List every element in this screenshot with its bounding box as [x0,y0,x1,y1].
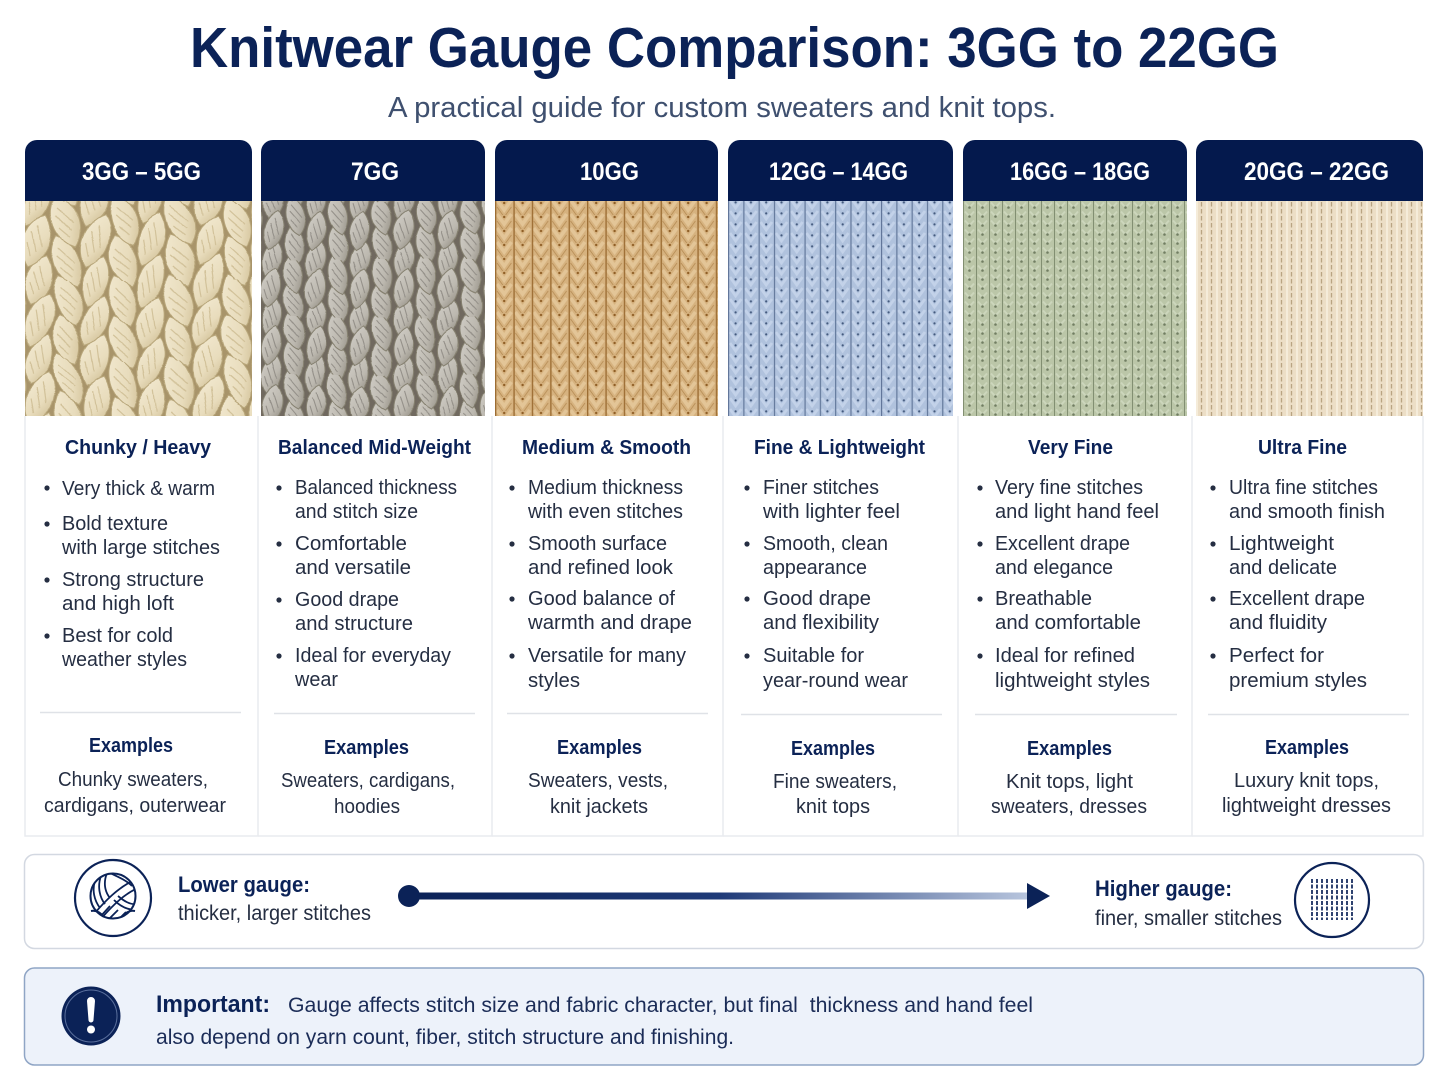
swatch: blue knit [728,201,953,416]
panel: 20GG-22GG [1192,140,1423,836]
bullet list [509,477,692,692]
examples: Chunky sweaters, [58,769,208,791]
bullet list [744,477,908,692]
header: 3GG-5GG [25,140,252,201]
panel: 3GG-5GG [0,140,285,836]
bullet list: Good drape [295,589,399,611]
bullet list: Bold texture [62,513,168,535]
header: 12GG-14GG [728,140,953,201]
examples: knit tops [796,796,870,818]
bullet list: Very thick & warm [62,478,215,500]
bullet list: and stitch size [295,501,418,523]
bullet list [1210,477,1385,692]
text: higher gauge: Higher gauge: [1095,876,1232,901]
panel: 10GG [492,140,723,836]
examples: Fine sweaters, [773,771,897,793]
examples: Examples [1027,738,1112,760]
bullet list: Strong structure [62,569,204,591]
text: lower gauge: thicker, larger stitches [178,902,371,925]
header: 16GG-18GG [963,140,1187,201]
bullet list: and structure [295,613,413,635]
header: 7GG: 7GG [351,158,399,186]
header: 16GG-18GG: 16GG – 18GG [1010,158,1150,186]
bullet list: Finer stitches [763,477,879,499]
swatch: chunky knit [25,201,252,416]
bullet list: with large stitches [61,537,220,559]
panel: 16GG-18GG [958,140,1192,836]
text: important note: also depend on yarn count, fiber, stitch structure and finishing. [156,1026,734,1049]
heading: Medium & Smooth: Medium & Smooth [522,436,691,459]
bullet list: Smooth surface [528,533,667,555]
examples: Sweaters, vests, [528,770,668,792]
bullet list: Versatile for many [528,645,686,667]
bullet list: Good balance of [528,588,675,610]
bullet list: Balanced thickness [295,477,457,499]
bullet list [276,477,457,691]
bullet list: Suitable for [763,645,864,667]
bullet list: and smooth finish [1229,501,1385,523]
bullet list: Ultra fine stitches [1229,477,1378,499]
swatch: beige knit [1196,201,1423,416]
bullet list: and high loft [62,593,174,615]
examples: Luxury knit tops, [1234,770,1379,792]
header: 7GG [261,140,485,201]
bullet list: Lightweight [1229,533,1334,555]
bullet list: and versatile [295,557,411,579]
bullet list: Excellent drape [1229,588,1365,610]
bullet list: Breathable [995,588,1092,610]
bullet list: and fluidity [1229,612,1327,634]
panel: 12GG-14GG [723,140,958,836]
header: 12GG-14GG: 12GG – 14GG [769,158,908,186]
swatch: green knit [963,201,1187,416]
heading: Ultra Fine: Ultra Fine [1258,436,1347,459]
examples: Examples [89,735,173,757]
icon: yarn ball [75,860,151,936]
text: important note [156,991,1033,1049]
examples: Examples [557,737,642,759]
panel: gauge scale [24,854,1424,948]
text: lower gauge [178,872,371,925]
examples: Examples [1265,737,1349,759]
bullet list: Perfect for [1229,645,1324,667]
bullet list: and flexibility [763,612,879,634]
examples: cardigans, outerwear [44,795,226,817]
swatch: tan knit [495,201,718,416]
examples [1222,737,1391,817]
bullet list: Excellent drape [995,533,1130,555]
panel: important note [24,968,1424,1065]
header: 3GG-5GG: 3GG – 5GG [82,158,201,186]
panel: 7GG [231,140,521,836]
bullet list: lightweight styles [995,670,1150,692]
examples [773,738,897,818]
header: 10GG: 10GG [580,158,639,186]
swatch: grey knit [261,201,485,416]
bullet list: Very fine stitches [995,477,1143,499]
examples: Examples [791,738,875,760]
bullet list: with lighter feel [762,501,900,523]
examples: hoodies [334,796,400,818]
subtitle: A practical guide for custom sweaters and knit tops. [388,92,1056,124]
bullet list [977,477,1159,692]
bullet list: Smooth, clean [763,533,888,555]
heading: Balanced Mid-Weight: Balanced Mid-Weight [278,436,471,459]
heading: Fine & Lightweight: Fine & Lightweight [754,436,925,459]
examples: Knit tops, light [1006,771,1133,793]
bullet list: warmth and drape [527,612,692,634]
icon: exclamation [62,986,120,1046]
bullet list: Ideal for refined [995,645,1135,667]
examples: Sweaters, cardigans, [281,770,455,792]
header: 20GG-22GG: 20GG – 22GG [1244,158,1389,186]
arrow: gauge scale [398,883,1050,909]
heading: Chunky / Heavy: Chunky / Heavy [65,436,212,459]
bullet list: and light hand feel [995,501,1159,523]
bullet list: styles [528,670,580,692]
bullet list: wear [294,669,338,691]
bullet list: and refined look [528,557,674,579]
examples [44,735,226,817]
bullet list: and comfortable [995,612,1141,634]
bullet list: Best for cold [62,625,173,647]
bullet list: weather styles [61,649,187,671]
examples: lightweight dresses [1222,795,1391,817]
bullet list [44,478,220,671]
bullet list: Medium thickness [528,477,683,499]
header: 20GG-22GG [1196,140,1423,201]
heading: Very Fine: Very Fine [1028,436,1113,459]
examples: sweaters, dresses [991,796,1147,818]
bullet list: Good drape [763,588,871,610]
bullet list: appearance [763,557,867,579]
bullet list: year-round wear [763,670,908,692]
text: higher gauge [1095,876,1282,930]
icon: fine stitches [1295,863,1369,937]
text: important note: Gauge affects stitch size and fabric character, but final thickness and hand feel [288,994,1033,1017]
header: 10GG [495,140,718,201]
bullet list: with even stitches [527,501,683,523]
bullet list: Ideal for everyday [295,645,451,667]
examples [991,738,1147,818]
text: lower gauge: Lower gauge: [178,872,310,897]
bullet list: premium styles [1229,670,1367,692]
bullet list: and delicate [1229,557,1337,579]
title: Knitwear Gauge Comparison: 3GG to 22GG [190,16,1279,80]
bullet list: and elegance [995,557,1113,579]
examples [281,737,455,818]
examples [528,737,668,818]
text: higher gauge: finer, smaller stitches [1095,907,1282,930]
bullet list: Comfortable [295,533,407,555]
examples: Examples [324,737,409,759]
examples: knit jackets [550,796,648,818]
text: important note: Important: [156,991,270,1018]
